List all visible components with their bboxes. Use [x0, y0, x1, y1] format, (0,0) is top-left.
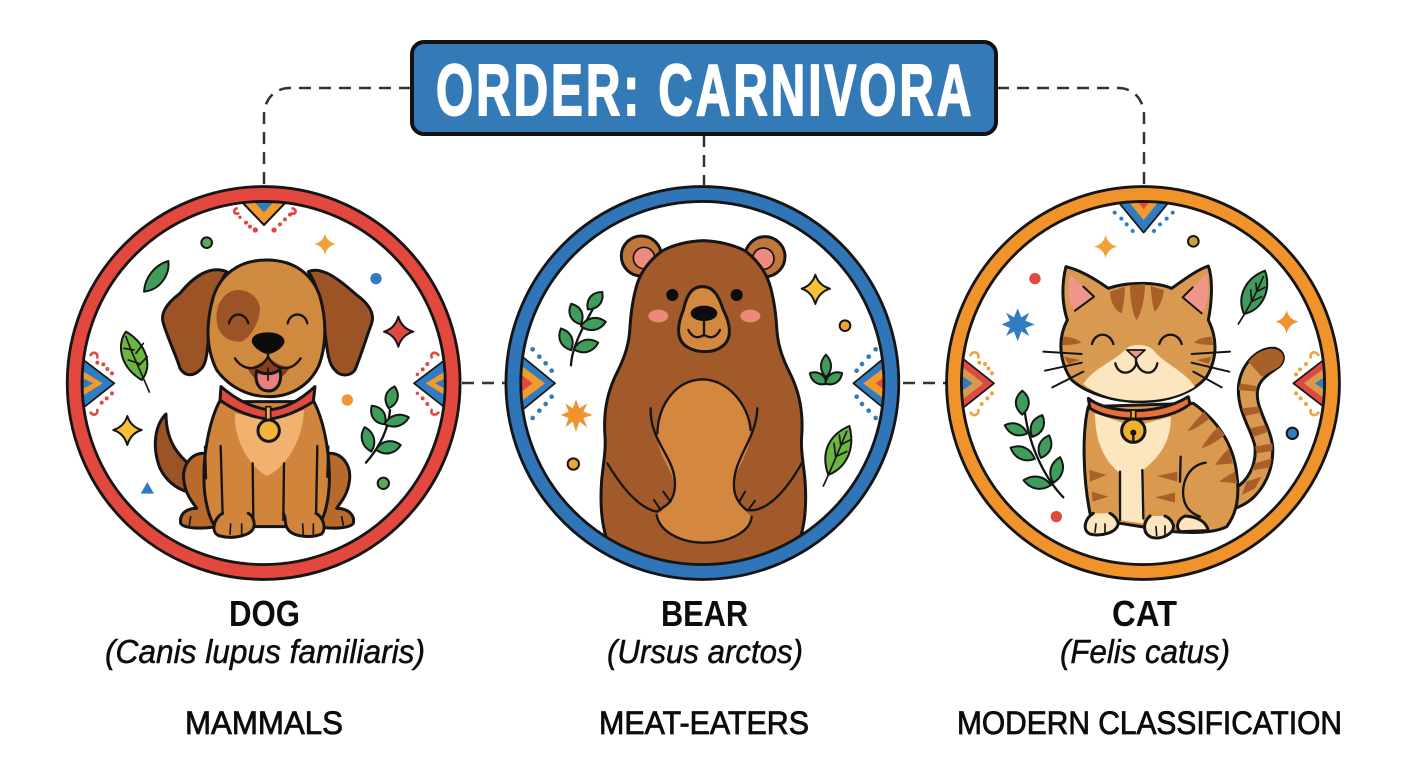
cat leaves and sprig — [1003, 271, 1267, 497]
bear sparkles and dots — [561, 275, 850, 470]
dashed connectors — [264, 88, 1144, 383]
bear circle background — [521, 201, 884, 565]
label: dog — [105, 593, 425, 741]
bear leaves and plants — [555, 288, 851, 486]
cat ring — [954, 194, 1332, 572]
label: cat: (Felis catus) — [1060, 633, 1230, 670]
panel: bear — [513, 194, 891, 573]
cat illustration — [1043, 266, 1283, 538]
bear illustration — [601, 236, 806, 573]
dog ornaments — [78, 200, 450, 415]
panel: dog — [75, 194, 453, 572]
label: dog: (Canis lupus familiaris) — [105, 633, 425, 670]
dog illustration — [155, 260, 373, 537]
cat circle background — [961, 201, 1325, 565]
bear ornaments — [518, 347, 890, 420]
label: bear — [599, 593, 809, 741]
label: cat — [957, 593, 1342, 741]
label: cat: MODERN CLASSIFICATION — [957, 705, 1342, 741]
cat ornaments — [958, 200, 1330, 415]
label: dog: DOG — [229, 593, 300, 634]
label: dog: MAMMALS — [185, 705, 343, 741]
cat sparkles and dots — [1002, 235, 1299, 522]
dog sparkles and dots — [113, 233, 413, 494]
label: cat: CAT — [1112, 593, 1177, 634]
dog leaves and sprig — [121, 261, 410, 463]
dog circle background — [82, 201, 445, 565]
panel: cat — [954, 194, 1332, 572]
dog ring — [75, 194, 453, 572]
title banner: ORDER: CARNIVORA — [436, 50, 974, 130]
label: bear: MEAT-EATERS — [599, 705, 809, 741]
label: bear: BEAR — [661, 593, 748, 634]
bear ring — [513, 194, 891, 572]
label: bear: (Ursus arctos) — [607, 633, 803, 670]
